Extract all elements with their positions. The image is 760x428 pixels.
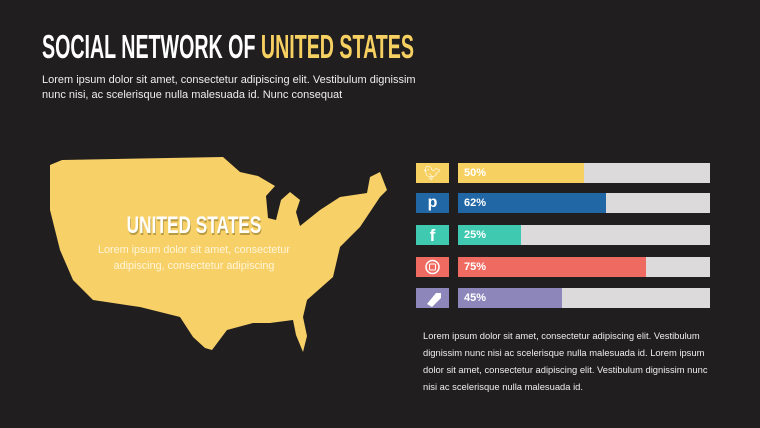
bar: tag 45% [458,288,710,308]
paragraph text: Lorem ipsum dolor sit amet, consectetur adipiscing elit. Vestibulum dignissim nunc nisi ac scelerisque nulla malesuada id. Lorem ipsum dolor sit amet, consectetur adipiscing elit. Vestibulum dignissim nunc nisi ac scelerisque nulla malesuada id. [423,330,708,392]
title: SOCIAL NETWORK OF UNITED STATES [42,28,414,65]
icon: pinterest: p [428,194,437,211]
icon: twitter: 🐦︎ [424,165,441,181]
icon: instagram [416,257,449,277]
bar: pinterest 62% [458,193,710,213]
icon: tag [416,288,449,308]
icon: facebook [416,225,449,245]
subtitle text: Lorem ipsum dolor sit amet, consectetur adipiscing elit. Vestibulum dignissim nunc nisi, ac scelerisque nulla malesuada id. Nunc consequat [42,74,416,101]
map label: united states: adipiscing, consectetur adipiscing [114,260,274,272]
bar: facebook 25% [458,225,710,245]
icon: facebook: f [430,226,435,245]
bar: facebook 25%: 25% [464,229,486,241]
bar: twitter 50% [458,163,710,183]
map label: united states: UNITED STATES [127,212,261,239]
bar: twitter 50%: 50% [464,167,486,179]
bar: tag 45%: 45% [464,292,486,304]
bar: instagram 75% [458,257,710,277]
icon: twitter [416,163,449,183]
icon: pinterest [416,193,449,213]
map label: united states [98,212,290,272]
bar: instagram 75%: 75% [464,261,486,273]
bar: pinterest 62%: 62% [464,197,486,209]
map label: united states: Lorem ipsum dolor sit amet, consectetur [98,244,290,256]
